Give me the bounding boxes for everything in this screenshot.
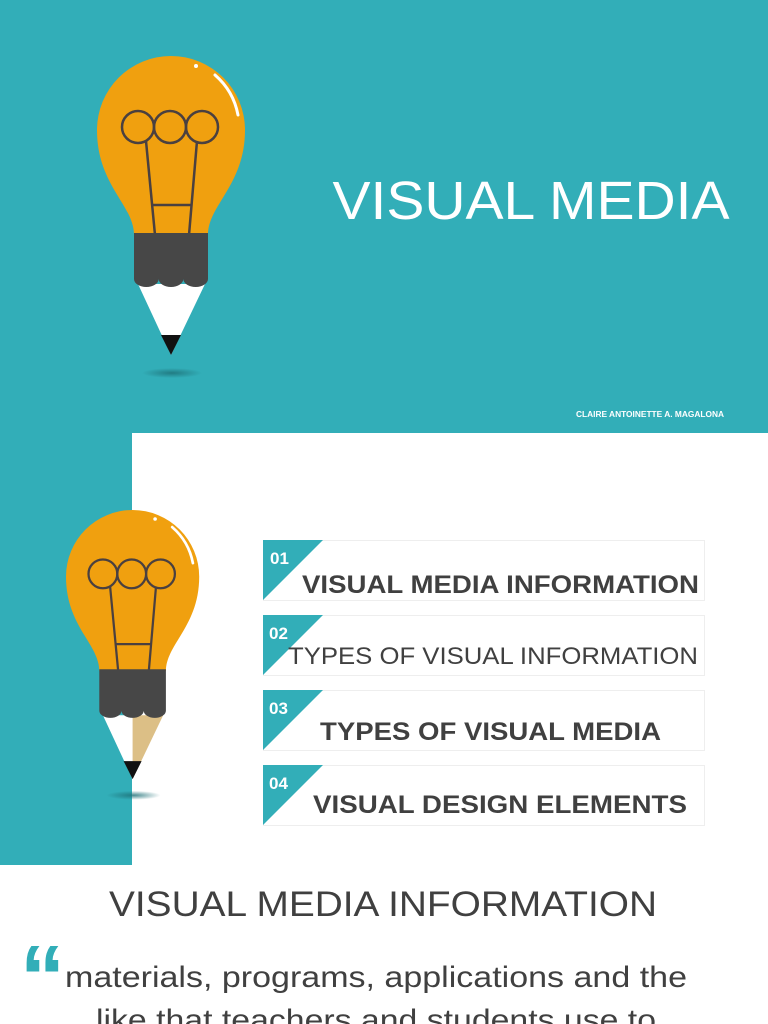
agenda item 03: 03 [269,699,288,718]
icon: lightbulb pencil (top) [97,56,245,378]
author credit: CLAIRE ANTOINETTE A. MAGALONA [576,410,724,419]
agenda item 04 [263,765,704,826]
agenda item 02: 02 [269,624,288,643]
agenda item 01: 01 [270,549,289,568]
agenda item 04: 04 [269,774,288,793]
agenda item 02: TYPES OF VISUAL INFORMATION [288,643,698,670]
top banner background [0,0,768,433]
title: VISUAL MEDIA [332,171,730,231]
section heading: VISUAL MEDIA INFORMATION [109,885,657,924]
agenda item 02 [263,615,704,676]
agenda item 04: VISUAL DESIGN ELEMENTS [313,791,687,819]
agenda item 01 [263,540,704,600]
agenda item 03: TYPES OF VISUAL MEDIA [320,718,661,746]
left teal panel [0,433,132,865]
agenda item 03 [263,690,704,750]
icon: lightbulb pencil (agenda) [66,510,199,800]
agenda item 01: VISUAL MEDIA INFORMATION [302,571,699,599]
body text [65,961,687,1024]
body text: materials, programs, applications and the [65,961,687,994]
